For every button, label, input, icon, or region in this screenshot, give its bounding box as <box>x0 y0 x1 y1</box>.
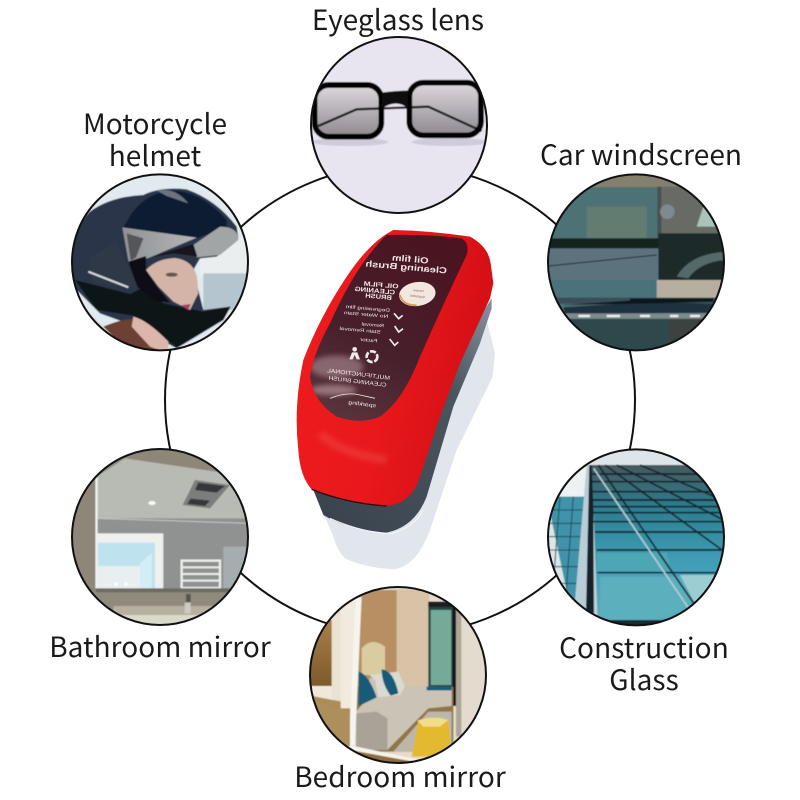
red shell <box>297 230 493 506</box>
label text: OIL FILM CLEANING BRUSH <box>354 280 399 302</box>
photo: car windscreen <box>547 173 725 352</box>
brand logo: sparkling <box>348 400 376 409</box>
product: oil film cleaning brush <box>297 230 495 569</box>
benefit list: Stain Removal <box>339 326 381 334</box>
badge <box>398 280 437 308</box>
title: Motorcycle helmet: Motorcycle <box>83 103 227 143</box>
title: Car windscreen: Car windscreen <box>540 134 742 174</box>
title: Construction Glass: Glass <box>609 659 679 699</box>
photo: motorcycle helmet <box>71 173 249 352</box>
label text: Oil film: Oil film <box>391 252 429 266</box>
label glare <box>310 355 363 395</box>
benefit list: No Water Stain <box>343 310 388 319</box>
badge: Upgraded <box>410 294 425 299</box>
shell lower edge <box>312 489 387 506</box>
brand logo <box>330 394 376 409</box>
benefit list: Degreasing film <box>345 304 390 313</box>
shell highlight <box>320 433 387 460</box>
photo: bedroom mirror <box>309 586 487 764</box>
recycle icons <box>349 347 377 362</box>
benefit list <box>339 304 403 345</box>
title: Eyeglass lens: Eyeglass lens <box>312 0 484 39</box>
benefit list: Removal <box>361 321 384 328</box>
connecting ring <box>165 165 635 635</box>
dark middle layer <box>313 298 492 533</box>
label text: MULTIFUNCTIONAL CLEANING BRUSH: MULTIFUNCTIONAL <box>327 368 390 382</box>
photo: eyeglasses <box>310 36 488 214</box>
title: Construction Glass: Construction <box>559 627 729 667</box>
badge: Renew <box>412 288 424 293</box>
photo: bathroom mirror <box>71 448 249 626</box>
photo: construction glass <box>547 448 725 626</box>
title: Bathroom mirror: Bathroom mirror <box>49 626 271 666</box>
title: Motorcycle helmet: helmet <box>109 135 202 175</box>
label text: OIL FILM CLEANING BRUSH: CLEANING <box>354 286 395 296</box>
label text: MULTIFUNCTIONAL CLEANING BRUSH <box>327 368 390 389</box>
label text: OIL FILM CLEANING BRUSH: OIL FILM <box>363 280 399 291</box>
layer rim <box>330 510 423 534</box>
benefit list: Factor <box>359 337 378 343</box>
label text: MULTIFUNCTIONAL CLEANING BRUSH: CLEANING BRUSH <box>328 376 387 389</box>
product label <box>310 235 468 421</box>
title: Bedroom mirror: Bedroom mirror <box>294 756 506 796</box>
label text: OIL FILM CLEANING BRUSH: BRUSH <box>364 292 392 302</box>
white brush base <box>323 320 495 569</box>
label text: Cleaning Brush: Cleaning Brush <box>365 258 447 276</box>
